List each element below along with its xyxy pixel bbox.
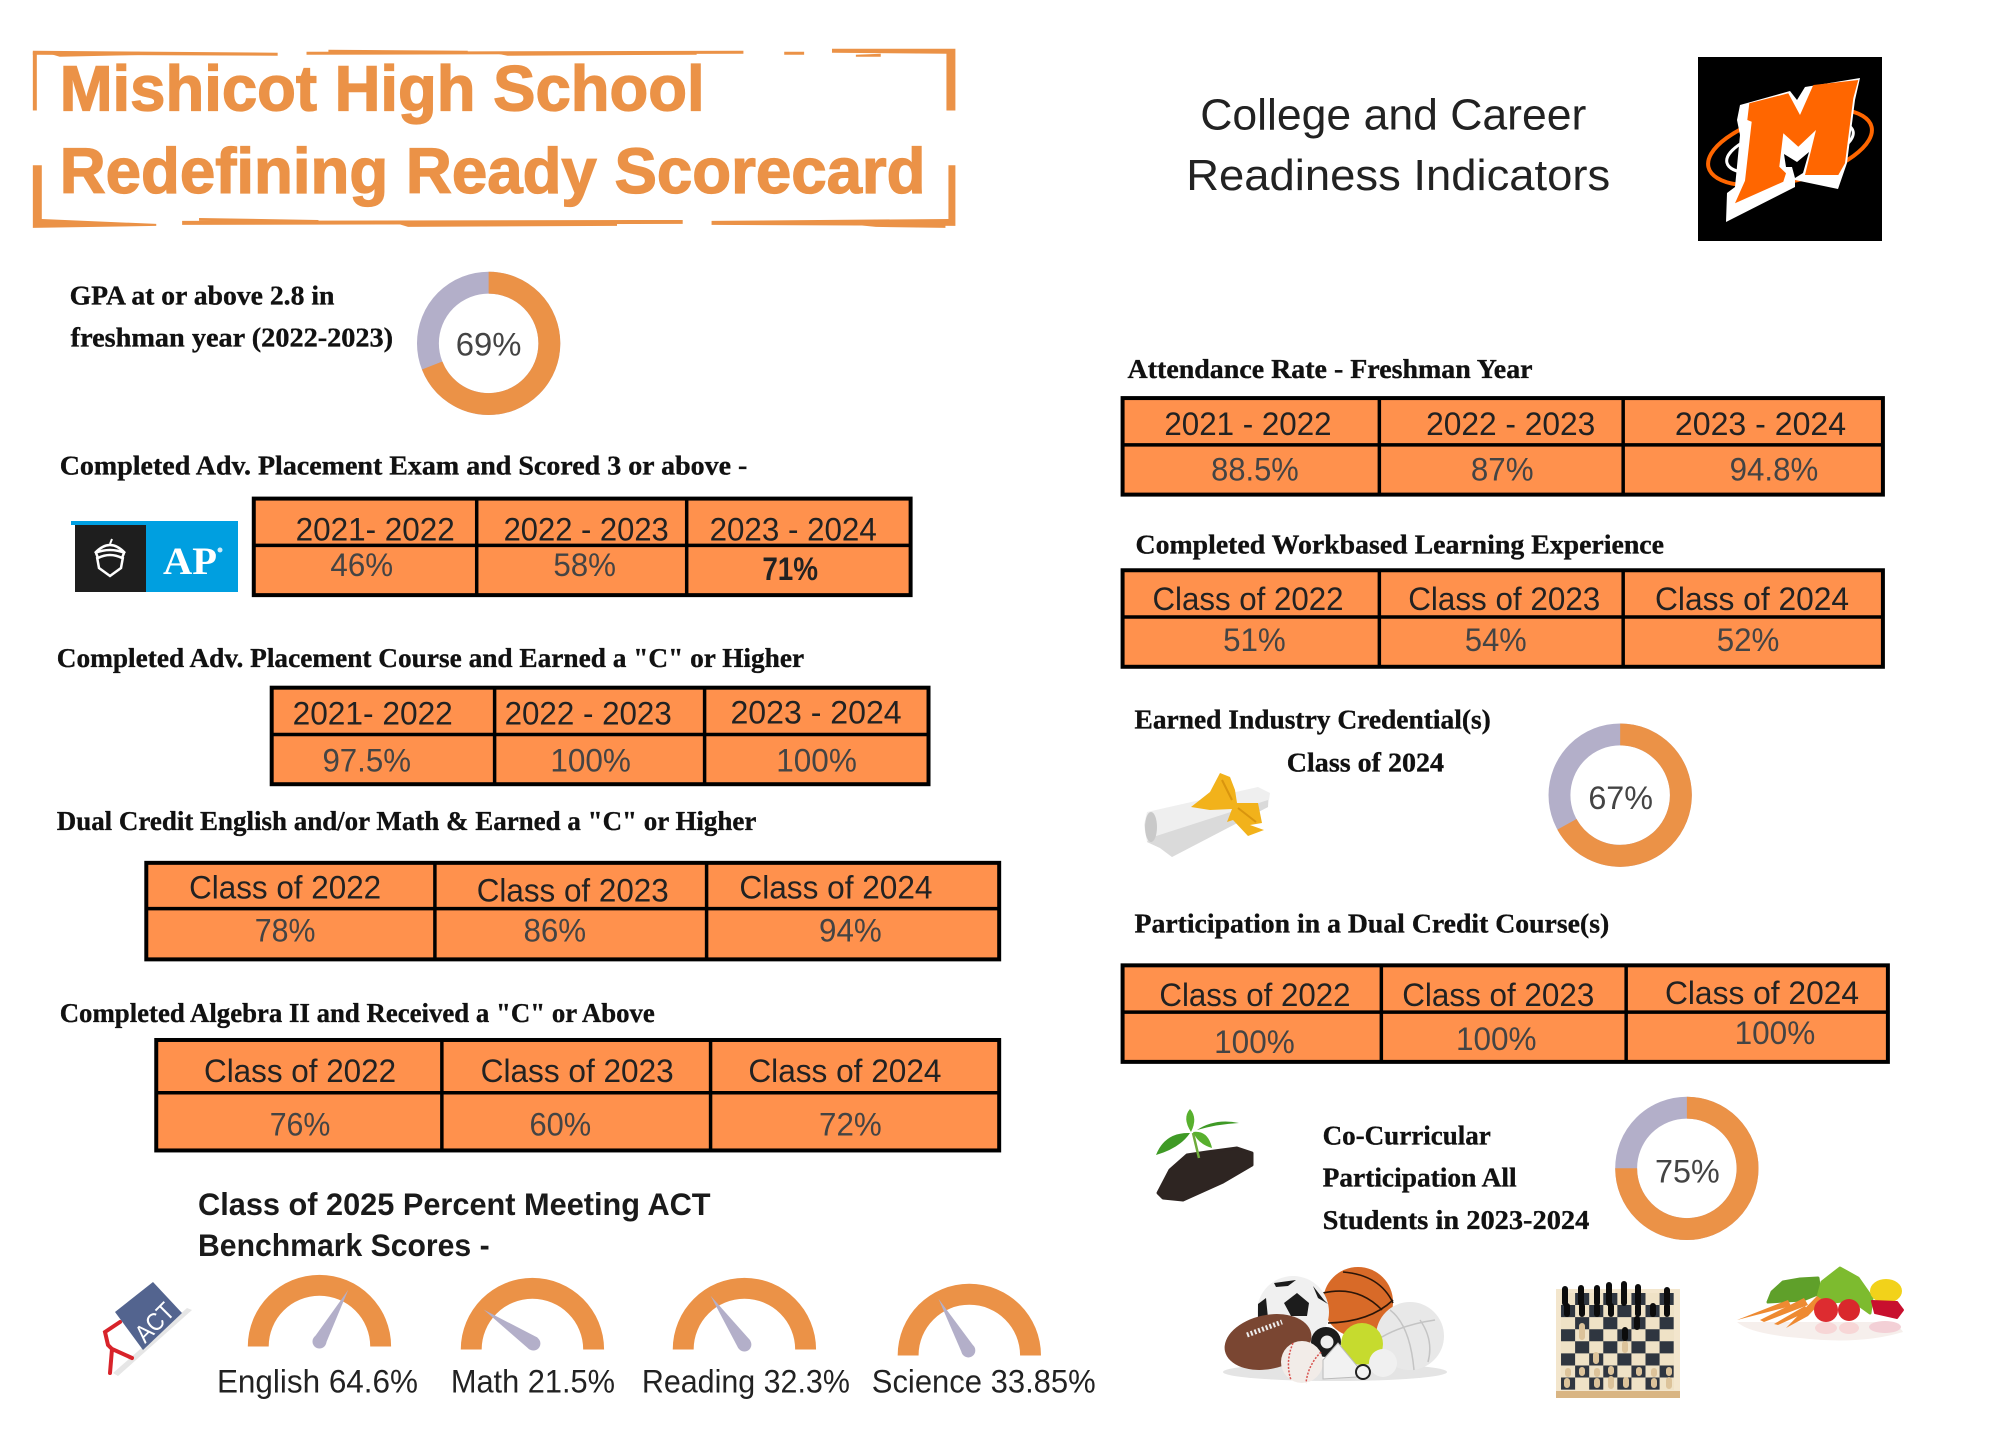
table: dual credit participation: Class of 2023	[1402, 976, 1594, 1013]
table: attendance: 87%	[1471, 451, 1534, 488]
table: Algebra II: Class of 2023	[481, 1052, 674, 1089]
table: workbased learning: 51%	[1223, 621, 1286, 658]
heading: AP exam: Completed Adv. Placement Exam and Scored 3 or above -	[60, 451, 747, 482]
table: workbased learning	[1123, 570, 1883, 667]
co-curricular label: Participation All	[1323, 1162, 1517, 1193]
table: dual credit participation: 100%	[1735, 1014, 1815, 1051]
heading: ACT benchmark: Benchmark Scores -	[198, 1227, 490, 1263]
co-curricular label: Students in 2023-2024	[1323, 1205, 1589, 1236]
gauge: English	[217, 1275, 418, 1399]
icon: ACT figure	[105, 1282, 192, 1376]
icon: AP logo	[71, 521, 238, 592]
table: dual credit participation: 100%	[1456, 1020, 1537, 1057]
table: AP exam: 58%	[553, 546, 616, 583]
gauge: Science	[872, 1284, 1096, 1399]
subtitle: College and Career Readiness Indicators	[1186, 90, 1610, 200]
table: workbased learning: 52%	[1717, 621, 1779, 658]
table: dual credit participation: Class of 2024	[1665, 974, 1859, 1011]
table: dual credit English/Math: Class of 2022	[189, 869, 381, 906]
gauge: Reading: Reading 32.3%	[642, 1362, 850, 1399]
icon: vegetables	[1737, 1268, 1903, 1340]
table: AP course: 2023 - 2024	[730, 694, 902, 731]
table: AP exam: 2022 - 2023	[504, 510, 669, 547]
table: AP course: 2021- 2022	[293, 695, 453, 732]
table: workbased learning: Class of 2023	[1408, 580, 1600, 617]
GPA label	[70, 281, 393, 353]
table: dual credit participation: 100%	[1214, 1023, 1295, 1060]
table: AP exam: 46%	[330, 546, 393, 583]
title frame	[33, 49, 955, 228]
table: AP exam: 2021- 2022	[296, 510, 455, 547]
table: attendance: 2021 - 2022	[1164, 405, 1332, 442]
gauge: Reading	[642, 1278, 850, 1399]
table: workbased learning: Class of 2024	[1655, 580, 1849, 617]
table: Algebra II: 72%	[819, 1106, 882, 1143]
icon: AP logo: AP	[163, 540, 217, 583]
title: Mishicot High School	[60, 53, 705, 124]
donut chart: GPA 69%	[428, 283, 549, 404]
table: AP course: 100%	[776, 741, 857, 778]
table: dual credit participation	[1123, 965, 1888, 1062]
GPA label: GPA at or above 2.8 in	[70, 281, 335, 312]
GPA label: freshman year (2022-2023)	[71, 322, 393, 353]
icon: ACT figure: ACT	[129, 1297, 180, 1348]
donut chart: co-curricular 75%: 75%	[1655, 1152, 1720, 1189]
table: AP exam: 2023 - 2024	[710, 510, 877, 547]
gauge: Science: Science 33.85%	[872, 1362, 1096, 1399]
gauge: Math: Math 21.5%	[451, 1362, 615, 1399]
table: Algebra II: 76%	[270, 1106, 330, 1143]
gauge: English: English 64.6%	[217, 1362, 418, 1399]
heading: ACT benchmark	[198, 1186, 711, 1263]
heading: AP course: Completed Adv. Placement Course and Earned a "C" or Higher	[57, 643, 804, 674]
table: dual credit English/Math: Class of 2024	[739, 869, 933, 906]
subtitle: College and Career Readiness Indicators: Readiness Indicators	[1186, 151, 1610, 200]
table: dual credit English/Math: 94%	[819, 911, 882, 948]
table: AP course: 100%	[550, 741, 631, 778]
icon: diploma scroll	[1144, 773, 1270, 857]
table: dual credit English/Math: Class of 2023	[477, 872, 669, 909]
heading: ACT benchmark: Class of 2025 Percent Meeting ACT	[198, 1186, 711, 1222]
table: attendance: 2022 - 2023	[1426, 405, 1595, 442]
table: AP exam: 71%	[762, 550, 818, 587]
table: Algebra II	[156, 1040, 999, 1150]
title: Redefining Ready Scorecard	[60, 136, 926, 207]
table: attendance	[1123, 398, 1883, 495]
table: attendance: 2023 - 2024	[1675, 405, 1846, 442]
table: Algebra II: 60%	[529, 1106, 591, 1143]
heading: workbased learning: Completed Workbased Learning Experience	[1136, 529, 1664, 560]
table: Algebra II: Class of 2024	[748, 1052, 941, 1089]
heading: industry credential: Earned Industry Credential(s)	[1135, 704, 1491, 735]
table: dual credit English/Math	[146, 863, 999, 959]
table: dual credit English/Math: 78%	[255, 911, 315, 948]
icon: sports balls	[1219, 1267, 1447, 1383]
table: attendance: 88.5%	[1211, 451, 1299, 488]
icon: school M logo	[1698, 57, 1882, 241]
heading: dual credit participation: Participation in a Dual Credit Course(s)	[1135, 909, 1609, 940]
table: Algebra II: Class of 2022	[204, 1052, 396, 1089]
table: AP course: 97.5%	[322, 741, 411, 778]
table: workbased learning: Class of 2022	[1152, 580, 1344, 617]
heading: industry credential	[1135, 704, 1491, 778]
donut chart: co-curricular 75%	[1626, 1108, 1748, 1229]
table: dual credit English/Math: 86%	[523, 911, 586, 948]
title	[60, 53, 926, 207]
gauge: Math	[451, 1278, 615, 1399]
table: attendance: 94.8%	[1730, 451, 1818, 488]
co-curricular label: Co-Curricular	[1323, 1120, 1491, 1151]
heading: Algebra II: Completed Algebra II and Received a "C" or Above	[60, 998, 655, 1029]
donut chart: GPA 69%: 69%	[456, 325, 521, 362]
heading: dual credit English/Math: Dual Credit English and/or Math & Earned a "C" or Higher	[57, 806, 756, 837]
table: dual credit participation: Class of 2022	[1159, 976, 1350, 1013]
icon: plant in soil	[1156, 1109, 1252, 1200]
co-curricular label	[1323, 1120, 1589, 1236]
icon: chess board	[1556, 1284, 1680, 1398]
donut chart: industry credential 67%	[1559, 734, 1681, 856]
donut chart: industry credential 67%: 67%	[1588, 779, 1653, 816]
table: AP course	[272, 688, 929, 784]
table: AP exam	[254, 499, 911, 595]
table: workbased learning: 54%	[1465, 621, 1527, 658]
heading: industry credential: Class of 2024	[1287, 747, 1444, 778]
heading: attendance: Attendance Rate - Freshman Year	[1128, 354, 1533, 385]
subtitle: College and Career Readiness Indicators: College and Career	[1200, 90, 1586, 139]
table: AP course: 2022 - 2023	[505, 695, 672, 732]
